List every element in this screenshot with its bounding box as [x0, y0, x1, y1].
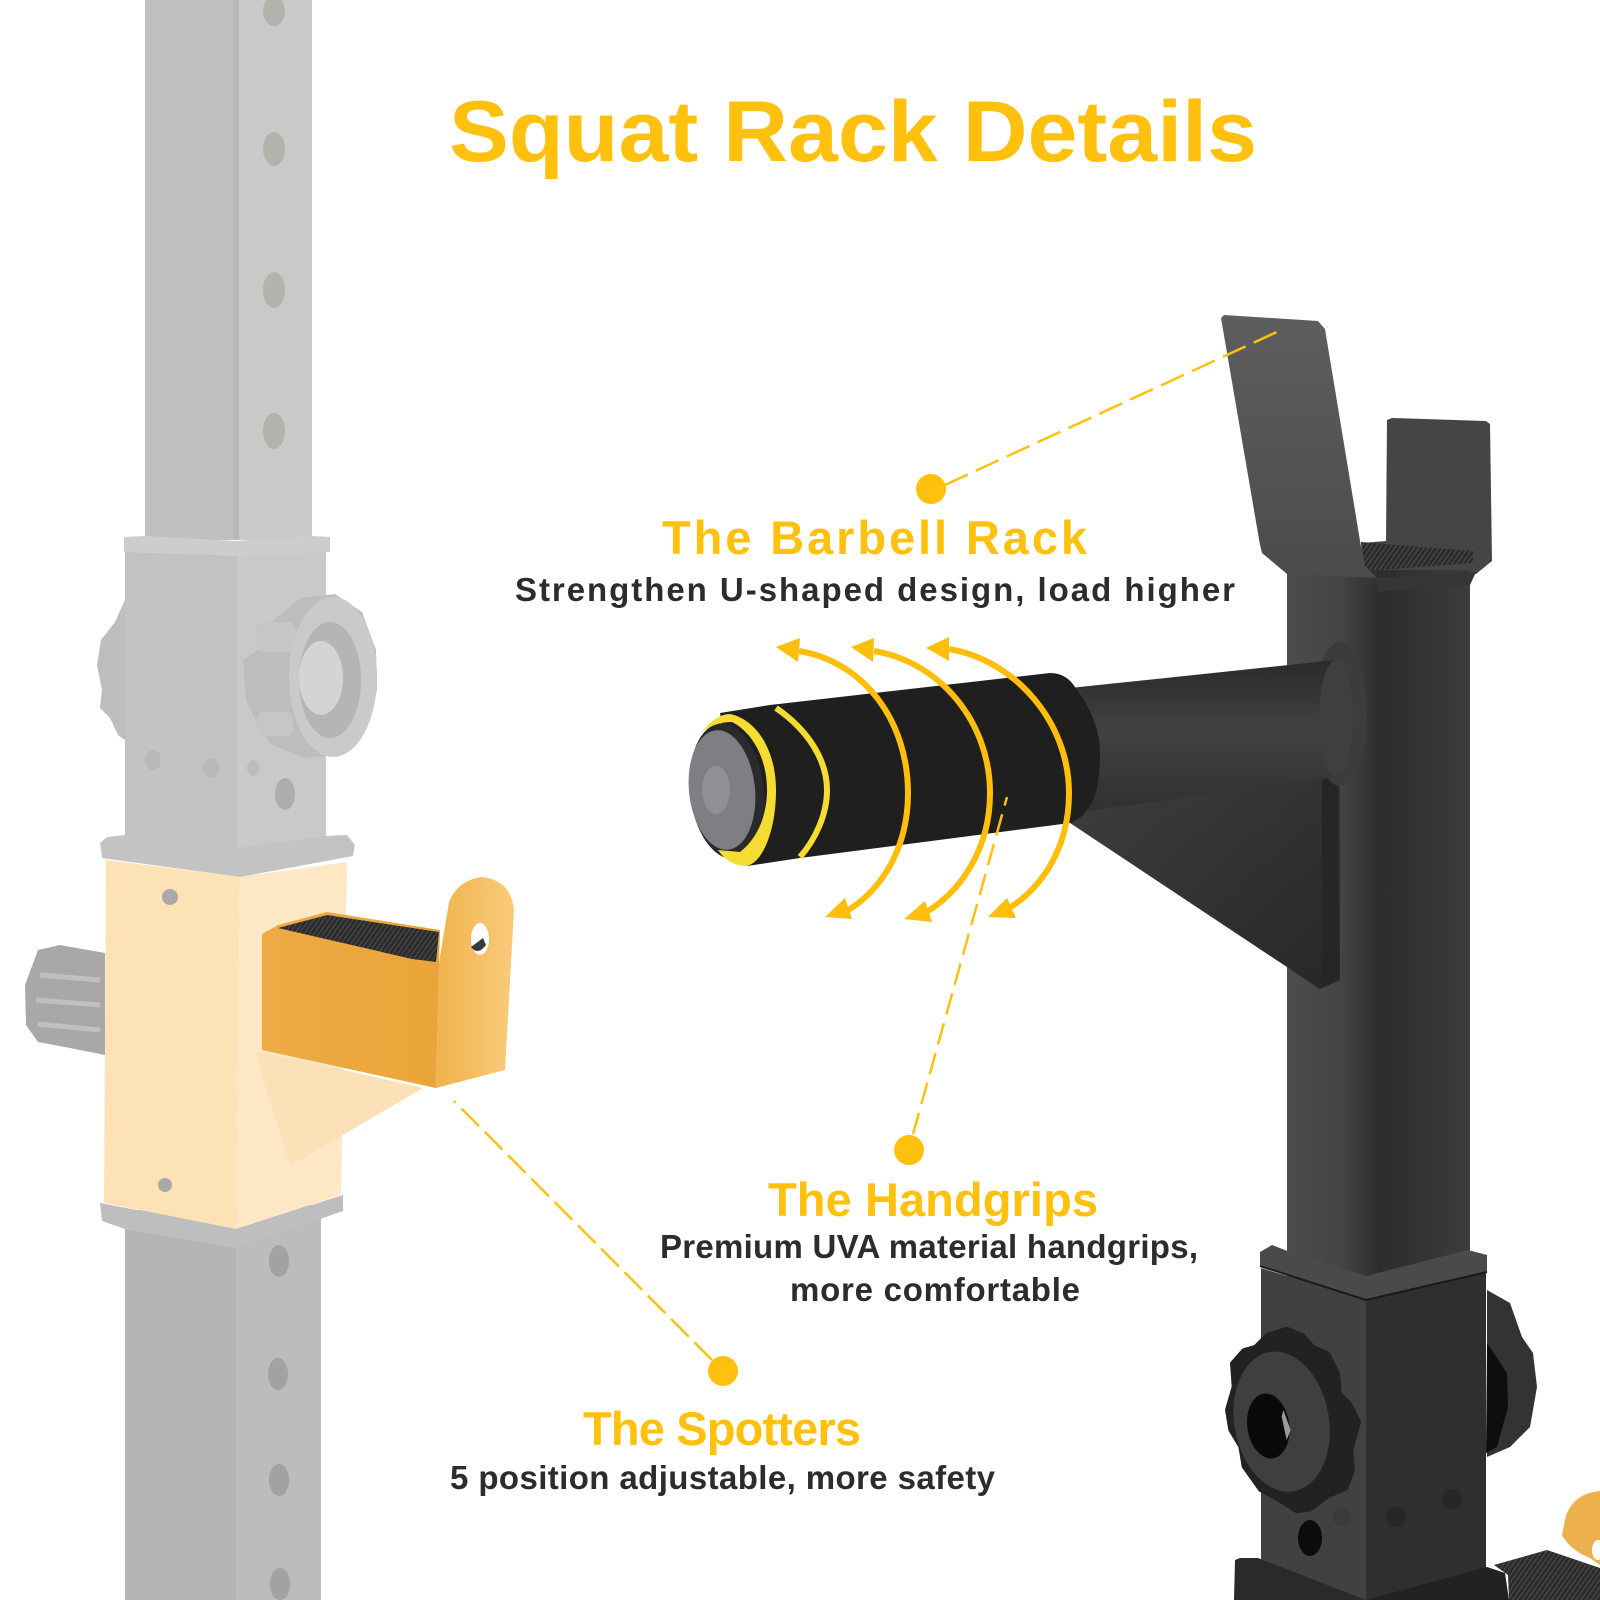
gray side knob	[25, 945, 105, 1055]
foam handgrip	[683, 673, 1100, 866]
icon: rotation arrow 3	[926, 637, 1069, 918]
gray front knob	[243, 594, 377, 758]
callout: the spotters	[450, 1402, 996, 1496]
description: Premium UVA material handgrips,	[660, 1228, 1198, 1265]
lower gray lip	[100, 1195, 343, 1248]
lower adjustment collar	[1260, 1245, 1487, 1600]
callout: the barbell rack	[515, 511, 1235, 608]
callout pointer: barbell rack	[916, 331, 1279, 504]
front black knob	[1223, 1328, 1359, 1512]
icon: rotation arrow 1	[776, 638, 908, 919]
tread pad	[1361, 542, 1473, 571]
gray adjustment collar	[124, 536, 330, 850]
orange spotter arm	[262, 877, 514, 1088]
steel arm tube	[1060, 642, 1367, 815]
heading: The Spotters	[583, 1402, 861, 1455]
foot plate with orange tab	[1494, 1491, 1600, 1600]
heading: The Barbell Rack	[662, 511, 1088, 564]
photo: faded rack upright with highlighted spotter	[25, 0, 514, 1600]
cream highlighted sleeve	[104, 860, 347, 1229]
description	[660, 1228, 1198, 1308]
upright post	[1287, 570, 1470, 1290]
description: more comfortable	[790, 1271, 1080, 1308]
gusset under the grip arm	[1070, 755, 1340, 989]
photo: black barbell rack upright	[683, 315, 1600, 1600]
upper gray post	[145, 0, 312, 540]
gusset under spotter	[255, 1052, 423, 1166]
rear black knob	[1486, 1290, 1537, 1457]
callout pointer: handgrips	[894, 797, 1007, 1165]
bottom collar lip and foot	[1234, 1558, 1509, 1600]
icon: rotation arrow 2	[851, 638, 990, 922]
upper gray lip	[100, 835, 355, 877]
description: Strengthen U-shaped design, load higher	[515, 571, 1235, 608]
gray rear knob	[97, 600, 125, 740]
title: Squat Rack Details	[449, 84, 1257, 180]
barbell holder front prong	[1221, 315, 1377, 578]
heading: The Handgrips	[768, 1173, 1098, 1226]
callout pointer: spotters	[454, 1101, 738, 1386]
lower gray post	[125, 1205, 321, 1600]
description: 5 position adjustable, more safety	[450, 1459, 996, 1496]
callout: the handgrips	[660, 1173, 1198, 1308]
barbell U-shaped holder rear prong	[1361, 418, 1492, 582]
